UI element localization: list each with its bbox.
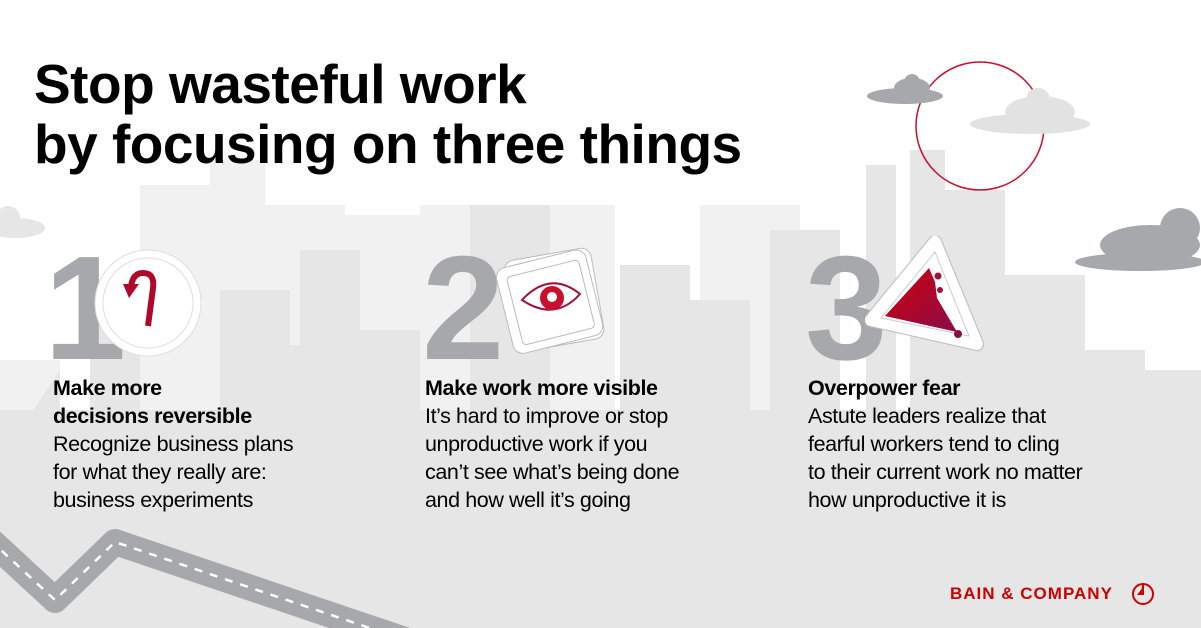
column 1 text: Recognize business plans [53, 432, 293, 456]
number 3: 3 [805, 226, 887, 391]
column 2 text [425, 376, 679, 512]
column 1 text: business experiments [53, 488, 253, 512]
column 3 text: fearful workers tend to cling [808, 432, 1059, 456]
column 3 text: how unproductive it is [808, 488, 1006, 512]
column 1 text: decisions reversible [53, 404, 252, 428]
road [0, 529, 410, 628]
sun circle [916, 62, 1044, 190]
title: by focusing on three things [34, 113, 742, 175]
icon: u-turn circle [94, 250, 202, 356]
column 2 text: can’t see what’s being done [425, 460, 679, 484]
logo: BAIN & COMPANY [950, 584, 1113, 603]
logo [950, 583, 1154, 605]
column 2 text: Make work more visible [425, 376, 658, 400]
column 1 text: Make more [53, 376, 162, 400]
column 3 text [808, 376, 1082, 512]
column 2 text: unproductive work if you [425, 432, 647, 456]
column 1 text: for what they really are: [53, 460, 266, 484]
number 1: 1 [44, 226, 126, 391]
column 3 text: Overpower fear [808, 376, 960, 400]
column 3 text: to their current work no matter [808, 460, 1082, 484]
icon: eye square [496, 248, 604, 354]
column 1 text [53, 376, 293, 512]
title [34, 53, 742, 175]
icon: warning triangle [865, 236, 984, 351]
clouds [867, 74, 943, 104]
title: Stop wasteful work [34, 53, 526, 115]
column 2 text: It’s hard to improve or stop [425, 404, 668, 428]
column 2 text: and how well it’s going [425, 488, 631, 512]
column 3 text: Astute leaders realize that [808, 404, 1046, 428]
number 2: 2 [422, 226, 504, 391]
